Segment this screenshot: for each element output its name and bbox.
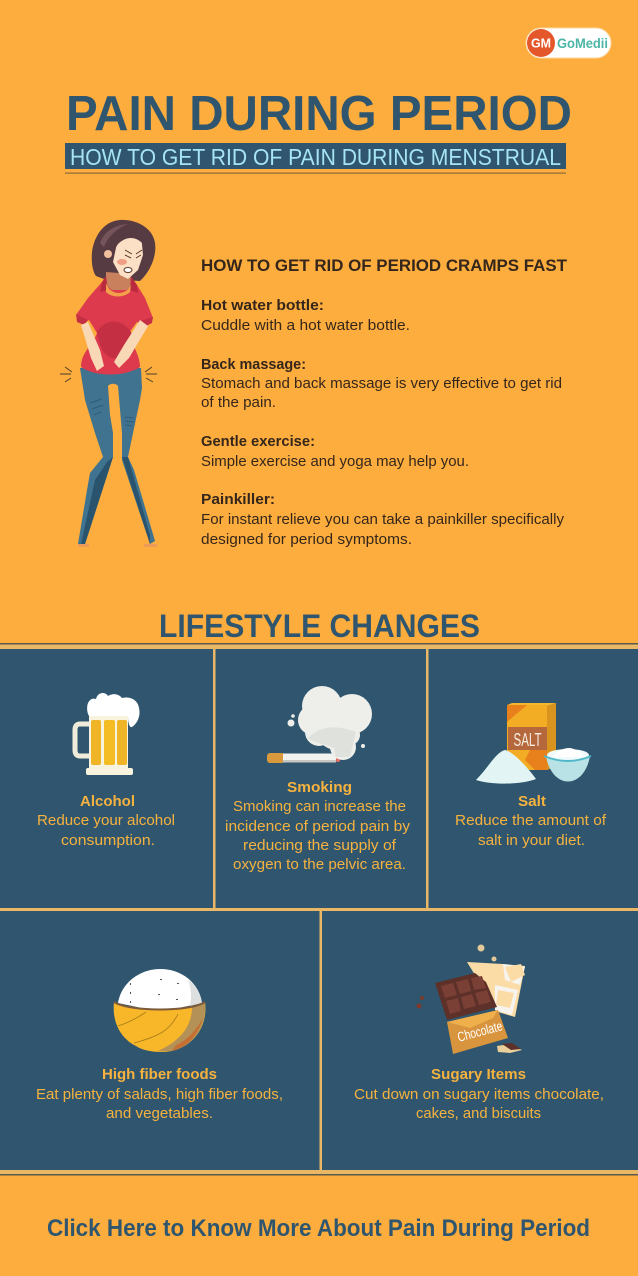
collar (100, 276, 138, 293)
text block: period cramps tips: Cuddle with a hot water bottle. (201, 317, 410, 334)
pain marks (60, 367, 157, 382)
panel: sugary items (354, 944, 604, 1122)
jeans shadow right (122, 457, 150, 544)
text block: period cramps tips: Hot water bottle: (201, 298, 324, 314)
footer call to action: Click Here to Know More About Pain During Period (47, 1215, 590, 1242)
panel: sugary items: Sugary Items (431, 1067, 526, 1083)
ear (104, 250, 112, 258)
jeans creases (90, 399, 134, 426)
neck (106, 272, 131, 292)
panel: high fiber foods: and vegetables. (106, 1105, 213, 1122)
heading: lifestyle changes: LIFESTYLE CHANGES (159, 608, 480, 644)
icon: salt box, pile and bowl: SALT (514, 730, 542, 750)
text block: period cramps tips (201, 256, 568, 548)
panel: high fiber foods: High fiber foods (102, 1067, 217, 1083)
text block: period cramps tips: designed for period symptoms. (201, 531, 412, 548)
text block: period cramps tips: Painkiller: (201, 492, 275, 508)
icon: cigarette and smoke (267, 686, 372, 763)
panel: salt: Salt (518, 794, 546, 810)
panel: salt (455, 703, 607, 849)
jeans (78, 368, 155, 544)
shirt belly shading (97, 322, 132, 358)
panel: smoking: oxygen to the pelvic area. (233, 856, 406, 873)
text block: period cramps tips: Gentle exercise: (201, 434, 315, 450)
jeans shadow left (81, 457, 113, 544)
panel: smoking (225, 686, 411, 873)
hair highlight (100, 224, 128, 247)
illustration: woman with cramps (60, 220, 157, 547)
icon: chocolate bar: Chocolate (456, 1018, 504, 1045)
panel: high fiber foods: Eat plenty of salads, high fiber foods, (36, 1086, 283, 1103)
icon: rice bowl (114, 969, 205, 1052)
logo: GoMedii (557, 35, 608, 51)
sleeve cuffs (76, 314, 153, 326)
panel: high fiber foods (36, 969, 283, 1122)
text block: period cramps tips: of the pain. (201, 394, 276, 411)
icon: salt box, pile and bowl (476, 703, 591, 784)
arms (81, 320, 148, 371)
logo (526, 28, 611, 58)
panel: salt: Reduce the amount of (455, 812, 607, 829)
panel: alcohol: consumption. (61, 832, 155, 849)
panel: salt: salt in your diet. (478, 832, 585, 849)
panel: alcohol (37, 693, 175, 849)
panel: alcohol: Alcohol (80, 794, 135, 810)
panel grid background (0, 643, 638, 1176)
text block: period cramps tips: Back massage: (201, 357, 306, 373)
icon: beer mug (75, 693, 140, 775)
panel: sugary items: cakes, and biscuits (416, 1105, 541, 1122)
subtitle banner: HOW TO GET RID OF PAIN DURING MENSTRUAL (70, 144, 561, 170)
text block: period cramps tips: For instant relieve you can take a painkiller specifically (201, 511, 564, 528)
feet (78, 544, 157, 547)
text block: period cramps tips: Stomach and back massage is very effective to get rid (201, 375, 562, 392)
panel: smoking: Smoking (287, 780, 352, 796)
panel: alcohol: Reduce your alcohol (37, 812, 175, 829)
hair fringe (113, 231, 144, 252)
panel: sugary items: Cut down on sugary items chocolate, (354, 1086, 604, 1103)
logo: GM (531, 36, 551, 50)
hair back (92, 220, 155, 281)
text block: period cramps tips: HOW TO GET RID OF PERIOD CRAMPS FAST (201, 256, 568, 275)
title: PAIN DURING PERIOD (66, 87, 572, 141)
eyes and mouth (125, 250, 142, 258)
shirt (76, 282, 153, 374)
cheek (117, 259, 127, 265)
neckline (106, 283, 131, 296)
panel: smoking: Smoking can increase the (233, 798, 406, 815)
panel: smoking: incidence of period pain by (225, 818, 411, 835)
icon: chocolate bar (416, 944, 525, 1054)
panel: smoking: reducing the supply of (243, 837, 397, 854)
face (113, 234, 143, 279)
text block: period cramps tips: Simple exercise and yoga may help you. (201, 453, 469, 470)
